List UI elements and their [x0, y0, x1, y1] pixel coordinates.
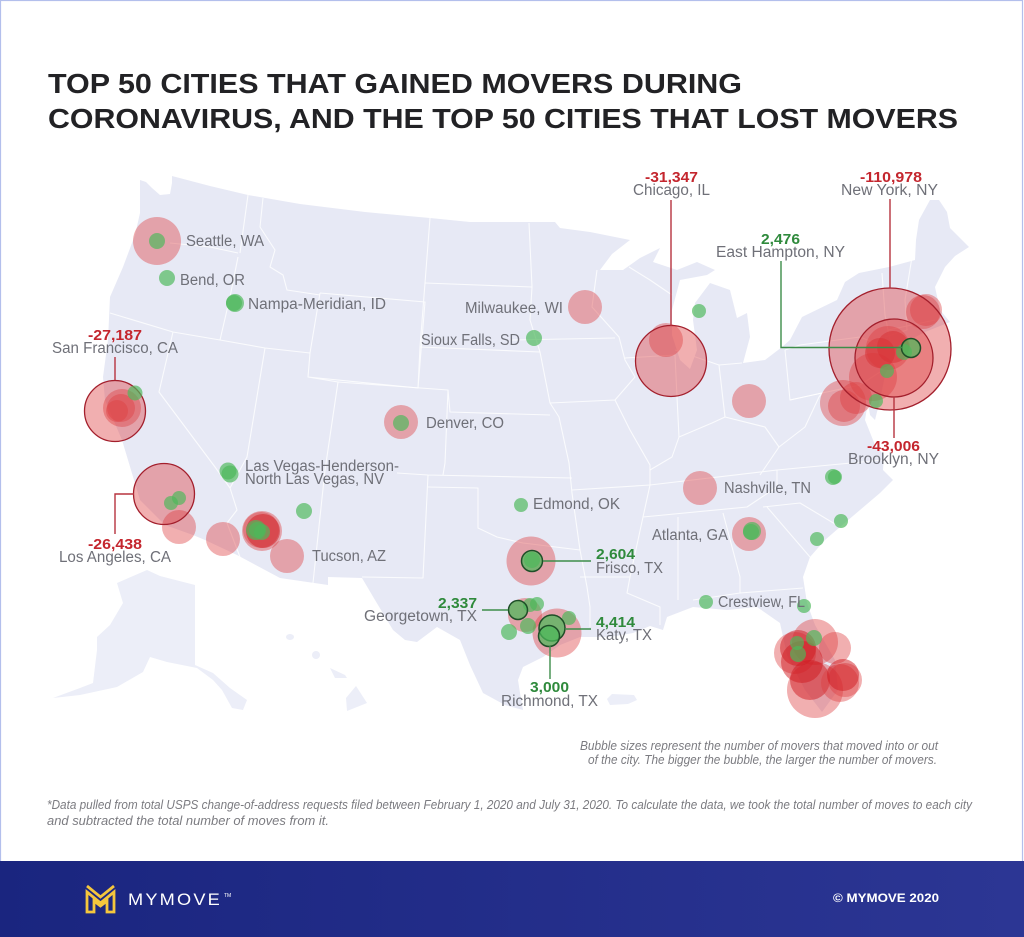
map of the United States: [53, 176, 969, 712]
title: TOP 50 CITIES THAT GAINED MOVERS DURING: [48, 68, 742, 99]
bubbles: cities that gained movers: [128, 233, 920, 662]
callout: Los Angeles, CA: Los Angeles, CA: [59, 549, 172, 566]
label: Las Vegas-Henderson-North Las Vegas, NV: Las Vegas-Henderson-: [245, 458, 399, 475]
label: Seattle, WA: Seattle, WA: [186, 233, 265, 250]
callout: New York, NY: [841, 169, 938, 288]
callout: East Hampton, NY: 2,476: [761, 231, 800, 248]
logo wordmark: MYMOVE: [128, 891, 222, 909]
label: Nampa-Meridian, ID: Nampa-Meridian, ID: [248, 296, 386, 313]
callout: Brooklyn, NY: -43,006: [867, 438, 920, 455]
callout: Richmond, TX: 3,000: [530, 679, 569, 696]
callout: Frisco, TX: [543, 546, 664, 577]
callout: Brooklyn, NY: Brooklyn, NY: [848, 451, 939, 468]
callout: Katy, TX: [565, 614, 653, 644]
label: Crestview, FL: Crestview, FL: [718, 594, 805, 611]
data source footnote: [47, 798, 973, 828]
icon: MyMove logo: [87, 886, 114, 912]
callout: Chicago, IL: -31,347: [645, 169, 698, 186]
label: Denver, CO: Denver, CO: [426, 415, 504, 432]
callout: Frisco, TX: 2,604: [596, 546, 636, 563]
label: Tucson, AZ: Tucson, AZ: [312, 548, 386, 565]
callout: New York, NY: New York, NY: [841, 182, 938, 199]
map: contiguous states: [103, 176, 969, 712]
callout: Georgetown, TX: [364, 595, 508, 625]
callout: Katy, TX: 4,414: [596, 614, 636, 631]
label: Sioux Falls, SD: Sioux Falls, SD: [421, 332, 520, 349]
label: Edmond, OK: Edmond, OK: [533, 496, 621, 513]
map: state borders: [110, 195, 935, 627]
bubble size note: of the city. The bigger the bubble, the larger the number of movers.: [588, 753, 937, 767]
map: Puerto Rico: [607, 694, 637, 705]
label: Atlanta, GA: Atlanta, GA: [652, 527, 729, 544]
callout: Chicago, IL: [633, 169, 710, 326]
callout: Los Angeles, CA: [59, 494, 172, 566]
callout: San Francisco, CA: -27,187: [88, 327, 142, 344]
callout: San Francisco, CA: [52, 327, 179, 380]
label: Milwaukee, WI: Milwaukee, WI: [465, 300, 563, 317]
footer band: [0, 861, 1024, 937]
callout: Brooklyn, NY: [848, 397, 939, 468]
callout: San Francisco, CA: San Francisco, CA: [52, 340, 179, 357]
bubble size note: [580, 739, 938, 767]
callout: Georgetown, TX: Georgetown, TX: [364, 608, 478, 625]
callout: New York, NY: -110,978: [860, 169, 922, 186]
callout: Chicago, IL: Chicago, IL: [633, 182, 710, 199]
copyright: © MYMOVE 2020: [833, 893, 939, 905]
bubble size note: Bubble sizes represent the number of movers that moved into or out: [580, 739, 938, 753]
callout: East Hampton, NY: East Hampton, NY: [716, 244, 845, 261]
logo wordmark: TM: [224, 893, 231, 899]
map: Alaska: [53, 570, 247, 710]
map: Hawaii: [286, 634, 367, 711]
callout: Katy, TX: Katy, TX: [596, 627, 653, 644]
callout: Georgetown, TX: 2,337: [438, 595, 477, 612]
callout: Los Angeles, CA: -26,438: [88, 536, 142, 553]
bubbles: cities that lost movers: [84, 217, 951, 718]
callout: Frisco, TX: Frisco, TX: [596, 560, 664, 577]
data source footnote: and subtracted the total number of moves from it.: [47, 814, 329, 828]
title: [48, 68, 958, 134]
callout: Richmond, TX: [501, 646, 599, 710]
label: Bend, OR: Bend, OR: [180, 272, 245, 289]
label: Las Vegas-Henderson-North Las Vegas, NV: [245, 458, 399, 488]
data source footnote: *Data pulled from total USPS change-of-address requests filed between February 1, 2020 and July 31, 2020. To calculate the data, we took the total number of moves to each city: [47, 798, 973, 812]
callout: East Hampton, NY: [716, 231, 902, 348]
label: Nashville, TN: Nashville, TN: [724, 480, 811, 497]
label: Las Vegas-Henderson-North Las Vegas, NV: North Las Vegas, NV: [245, 471, 385, 488]
title: CORONAVIRUS, AND THE TOP 50 CITIES THAT LOST MOVERS: [48, 103, 958, 134]
callout: Richmond, TX: Richmond, TX: [501, 693, 599, 710]
